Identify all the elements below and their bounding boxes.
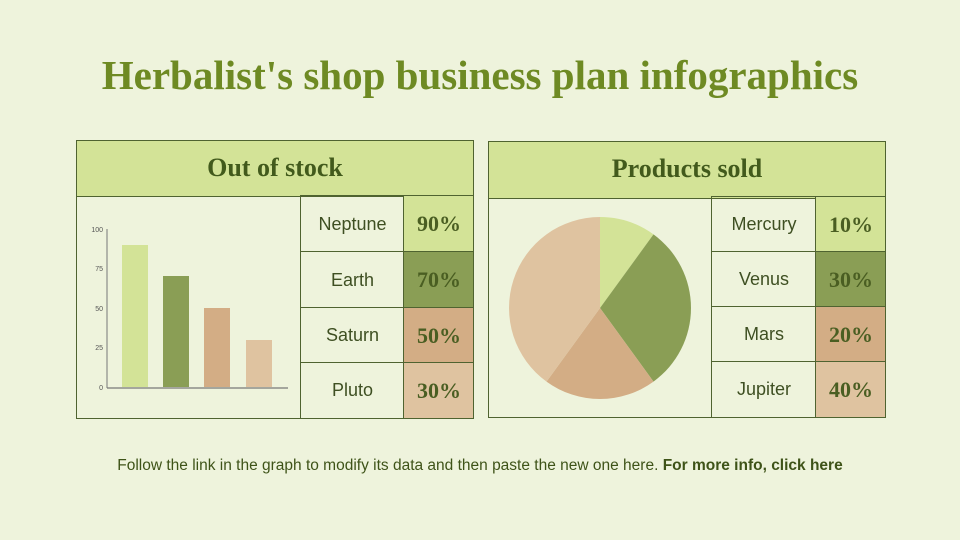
panel: products sold: 10%: [829, 212, 873, 236]
panel: out of stock: 70%: [417, 267, 461, 292]
row: Earth: Earth: [331, 270, 374, 290]
panel: products sold: 20%: [829, 322, 873, 346]
row: Earth: [300, 251, 404, 308]
bar chart: 0: [99, 385, 103, 392]
heading: out of stock: Out of stock: [207, 153, 343, 182]
heading: out of stock: [77, 141, 473, 197]
footer text: Follow the link in the graph to modify its data and then paste the new one here. For more info, click here: [117, 457, 843, 474]
row: Neptune: [300, 195, 404, 252]
heading: products sold: [489, 142, 885, 199]
bar chart: 100: [91, 227, 103, 234]
panel: out of stock: 50%: [417, 322, 461, 348]
row: Pluto: [300, 362, 404, 418]
row: Mercury: [711, 196, 816, 252]
row: Jupiter: Jupiter: [737, 379, 791, 399]
row: Saturn: Saturn: [326, 325, 379, 345]
bar chart: 50: [95, 306, 103, 313]
panel: out of stock: 30%: [417, 378, 461, 402]
row: Venus: Venus: [739, 269, 789, 289]
panel: products sold: 40%: [829, 376, 873, 402]
pie chart: [509, 217, 691, 399]
title: Herbalist's shop business plan infographics: [102, 52, 858, 98]
panel: products sold: [488, 141, 886, 418]
row: Jupiter: [711, 361, 816, 417]
panel: out of stock: 90%: [417, 211, 461, 236]
heading: products sold: Products sold: [612, 154, 762, 183]
row: Neptune: Neptune: [318, 214, 387, 234]
row: Mars: [711, 306, 816, 362]
row: Mercury: Mercury: [731, 214, 796, 234]
row: Venus: [711, 251, 816, 307]
row: Saturn: [300, 307, 404, 363]
panel: products sold: 30%: [829, 266, 873, 292]
row: Mars: Mars: [744, 324, 784, 344]
bar chart: 25: [95, 345, 103, 352]
bar chart: [91, 227, 288, 392]
bar chart: 75: [95, 266, 103, 273]
row: Pluto: Pluto: [332, 380, 373, 400]
panel: out of stock: [76, 140, 474, 419]
